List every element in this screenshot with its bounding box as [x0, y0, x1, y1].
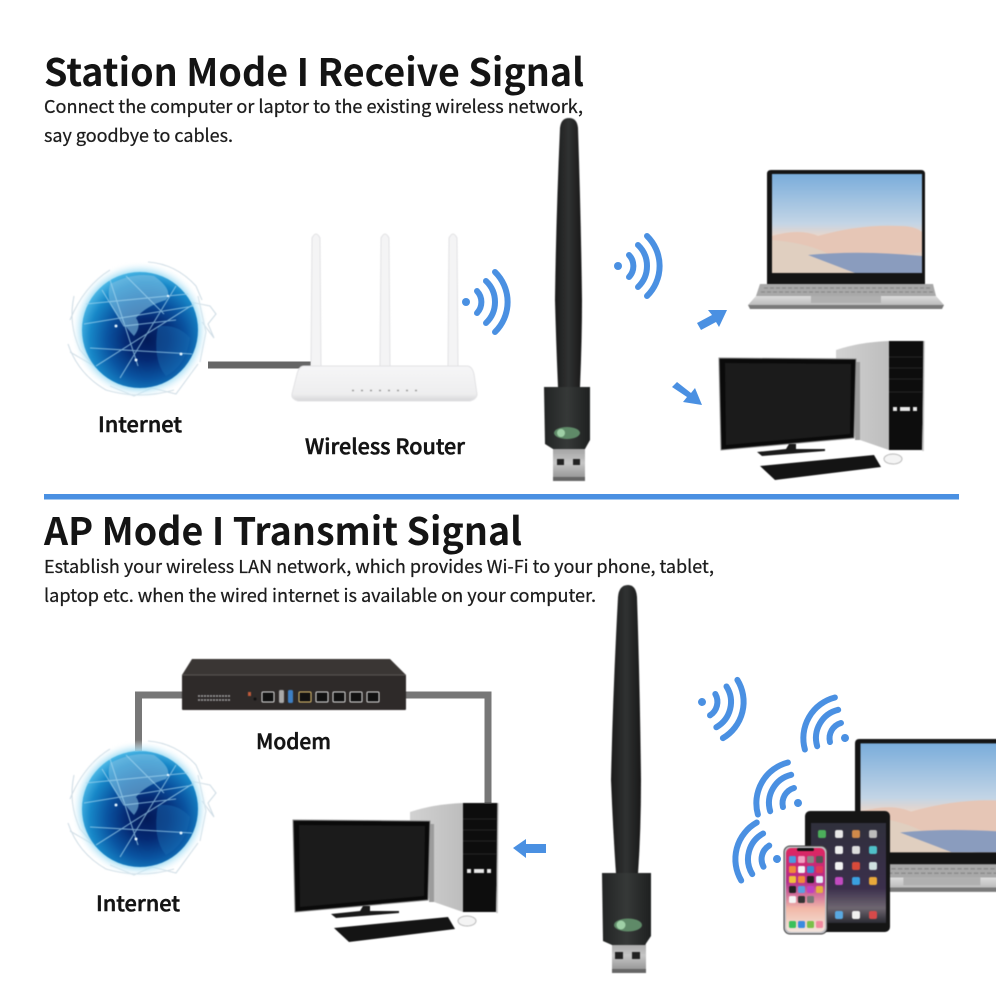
label: wireless router: Wireless Router: [305, 431, 465, 461]
icon: wifi signal to phone: [729, 819, 789, 889]
arrow: to laptop: [697, 310, 727, 330]
description: ap mode: laptop etc. when the wired internet is available on your computer.: [44, 582, 596, 608]
icon: wifi signal to tablet: [747, 756, 816, 831]
divider: [44, 494, 959, 500]
icon: laptop: [748, 170, 944, 309]
icon: modem: [182, 659, 406, 710]
description: ap mode: [44, 553, 714, 608]
description: station mode: [44, 93, 583, 148]
icon: smartphone: [784, 846, 827, 934]
title: station mode: Station Mode I Receive Signal: [44, 42, 584, 97]
title: ap mode: AP Mode I Transmit Signal: [43, 501, 522, 556]
description: station mode: say goodbye to cables.: [44, 122, 233, 148]
icon: desktop computer: [293, 803, 498, 942]
icon: internet globe: [68, 261, 216, 399]
icon: wifi signal to laptop: [794, 691, 863, 766]
icon: wifi signal from adapter: [614, 236, 660, 296]
description: station mode: Connect the computer or laptor to the existing wireless network,: [44, 93, 583, 119]
description: ap mode: Establish your wireless LAN network, which provides Wi-Fi to your phone, tablet,: [44, 553, 714, 579]
icon: usb wifi adapter: [544, 118, 590, 481]
arrow: to computer: [513, 839, 546, 858]
cable: globe to router: [208, 362, 311, 368]
cable: globe to modem: [138, 695, 183, 751]
icon: internet globe: [68, 740, 216, 878]
arrow: to desktop: [672, 382, 702, 405]
cable: modem to computer: [405, 695, 488, 803]
label: modem: Modem: [256, 726, 331, 756]
icon: tablet: [805, 811, 890, 932]
icon: wifi signal from adapter: [691, 672, 750, 741]
icon: usb wifi adapter: [602, 585, 651, 973]
icon: wireless router: [292, 234, 477, 401]
icon: desktop computer: [719, 341, 924, 480]
icon: wifi signal from router: [462, 272, 508, 332]
icon: laptop: [834, 739, 996, 892]
label: internet: Internet: [98, 409, 182, 439]
label: internet: Internet: [96, 888, 180, 918]
